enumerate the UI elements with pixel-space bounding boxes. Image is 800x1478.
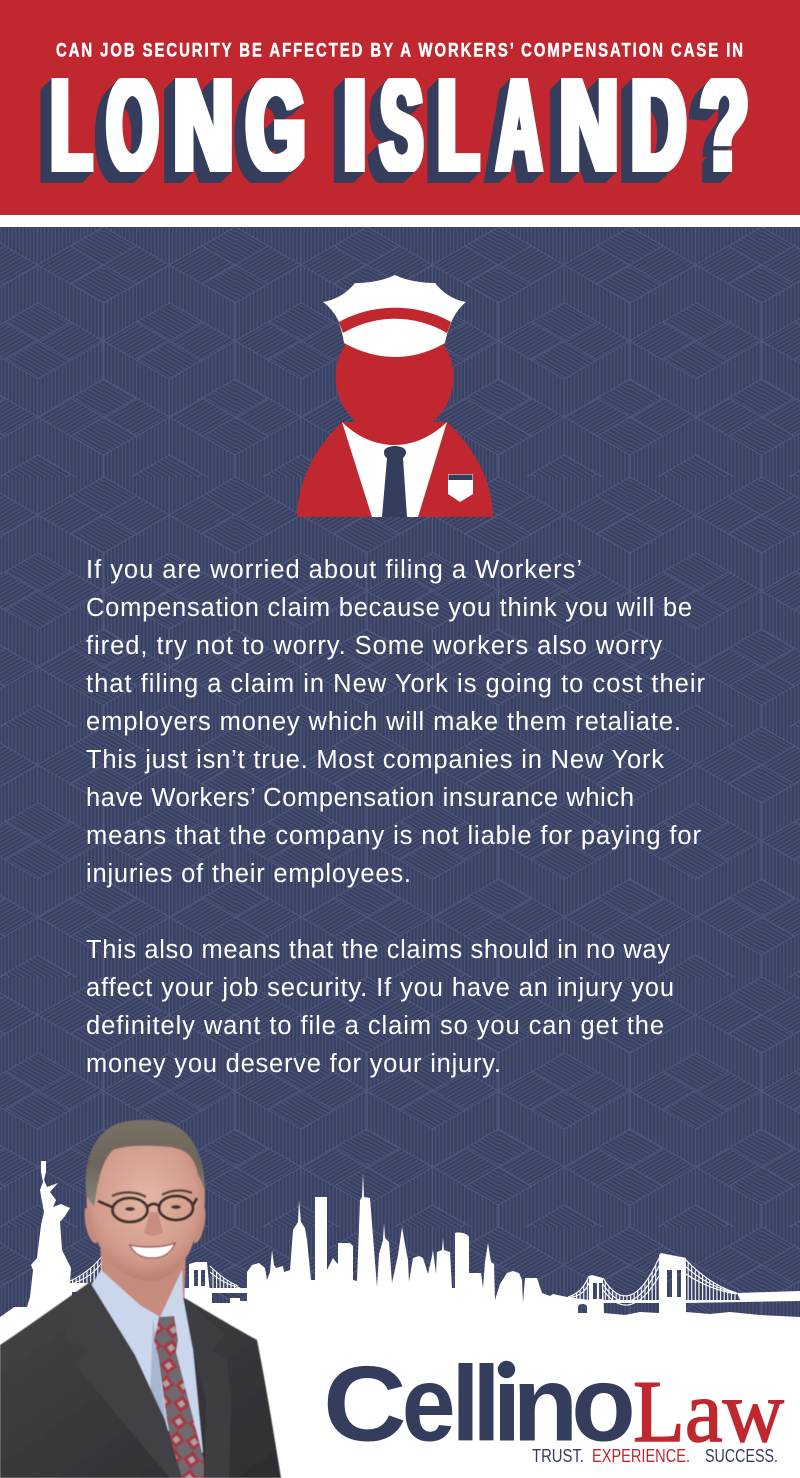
- guard head: [336, 318, 454, 436]
- bridge cables: [568, 1258, 737, 1305]
- guard cap: [323, 275, 466, 357]
- tagline: success: SUCCESS.: [705, 1446, 778, 1466]
- paragraph 2: definitely want to file a claim so you can get the: [86, 1012, 664, 1040]
- title: LONG ISLAND?: O: [107, 51, 158, 200]
- bridge deck: [568, 1291, 800, 1303]
- bridge small arch gap: [578, 1304, 587, 1313]
- title: LONG ISLAND?: D: [631, 51, 686, 200]
- paragraph 1: employers money which will make them retaliate.: [86, 708, 681, 736]
- bridge tower right: [659, 1253, 686, 1313]
- paragraph 2: money you deserve for your injury.: [86, 1050, 501, 1078]
- paragraph 1: [86, 556, 705, 888]
- eyebrows: [112, 1191, 192, 1197]
- Law wordmark: Law: [633, 1364, 784, 1461]
- paragraph 1: that filing a claim in New York is going to cost their: [86, 670, 705, 698]
- title: LONG ISLAND?: G: [246, 51, 306, 200]
- paragraph 1: means that the company is not liable for paying for: [86, 822, 702, 850]
- guard body jacket: [297, 422, 493, 517]
- nose shadow: [144, 1212, 163, 1236]
- Cellino wordmark: l: [451, 1344, 480, 1464]
- Cellino wordmark: l: [472, 1344, 501, 1464]
- attorney portrait: [0, 1120, 281, 1478]
- bridge tower left: [589, 1275, 604, 1313]
- guard tie: [382, 446, 407, 517]
- tagline: [532, 1446, 778, 1466]
- paragraph 1: Compensation claim because you think you will be: [86, 594, 692, 622]
- tagline: trust: TRUST.: [532, 1446, 584, 1466]
- title: LONG ISLAND?: I: [343, 51, 367, 200]
- guard badge: [448, 474, 473, 502]
- left bridge: gaps under the deck: [72, 1292, 247, 1305]
- shirt collar shadow: [150, 1318, 167, 1430]
- title: LONG ISLAND?: L: [50, 51, 92, 200]
- glasses: [98, 1196, 197, 1222]
- neck: [100, 1240, 186, 1320]
- mouth: [130, 1243, 175, 1258]
- red header banner: [0, 0, 800, 215]
- title: LONG ISLAND?: ?: [700, 51, 749, 200]
- skyline: [0, 1161, 800, 1478]
- jaw and face: [86, 1140, 205, 1281]
- title: LONG ISLAND?: A: [496, 51, 542, 200]
- paragraph 1: If you are worried about filing a Workers’: [86, 556, 582, 584]
- title: LONG ISLAND?: L: [438, 51, 479, 200]
- title: LONG ISLAND?: N: [173, 51, 234, 200]
- logo: [323, 1344, 784, 1466]
- body text: [86, 556, 705, 1078]
- ears: [85, 1208, 205, 1243]
- paragraph 2: affect your job security. If you have an injury you: [86, 974, 674, 1002]
- tagline: experience: EXPERIENCE.: [592, 1446, 690, 1466]
- right lapel: [183, 1297, 231, 1478]
- necktie: [154, 1316, 204, 1478]
- logo: round dot on the i: [496, 1358, 518, 1380]
- paragraph 1: This just isn’t true. Most companies in New York: [86, 746, 664, 774]
- shirt: [90, 1270, 203, 1453]
- paragraph 1: injuries of their employees.: [86, 860, 411, 888]
- title: LONG ISLAND?: [40, 78, 748, 183]
- Brooklyn bridge: [568, 1253, 800, 1313]
- Cellino wordmark: C: [323, 1344, 407, 1464]
- Cellino wordmark: i: [493, 1344, 521, 1464]
- paragraph 2: [86, 936, 674, 1078]
- guard cap band: [339, 308, 451, 333]
- hair: [86, 1120, 205, 1206]
- Cellino wordmark: o: [571, 1344, 636, 1464]
- New York skyline silhouette and white footer: [0, 1161, 800, 1478]
- paragraph 1: have Workers’ Compensation insurance which: [86, 784, 634, 812]
- bridge hangers: [568, 1258, 737, 1301]
- paragraph 2: This also means that the claims should in no way: [86, 936, 670, 964]
- left bridge: tower and cables: [68, 1256, 240, 1294]
- suit: [0, 1282, 281, 1478]
- title: LONG ISLAND?: N: [560, 51, 618, 200]
- Cellino wordmark: e: [402, 1344, 456, 1464]
- paragraph 1: fired, try not to worry. Some workers also worry: [86, 632, 662, 660]
- eyes: [125, 1205, 181, 1211]
- Cellino wordmark: n: [512, 1344, 578, 1464]
- icon: security guard: [297, 275, 493, 517]
- title: LONG ISLAND?: S: [380, 51, 423, 200]
- guard shirt: [342, 422, 447, 517]
- left lapel: [65, 1282, 182, 1478]
